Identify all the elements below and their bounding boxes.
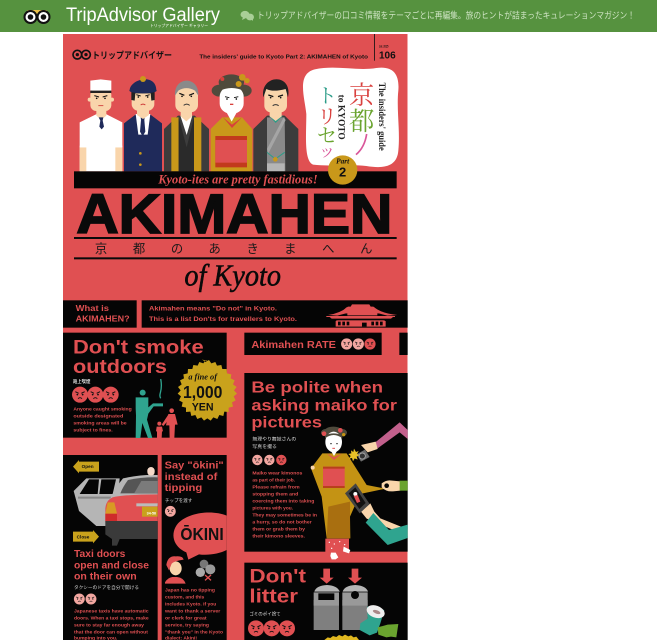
japanese subtitle: [95, 242, 373, 256]
issue number: Jul. 2015: [379, 45, 388, 49]
arrow: open: [73, 460, 99, 473]
panel: say okini: tipping: [165, 483, 202, 494]
arrow: open: Open: [82, 464, 94, 469]
panel: be polite: as part of their job.: [252, 477, 295, 482]
title card: white blob: セ: [317, 126, 337, 148]
panel: be polite: asking maiko for: [251, 397, 397, 414]
body text: want to thank a server: [164, 608, 221, 613]
rule: [74, 237, 397, 239]
rate box: [244, 333, 382, 355]
japanese subtitle: へ: [322, 242, 335, 256]
japanese label: チップを渡す: [165, 497, 193, 504]
rating faces: [72, 387, 119, 403]
illustration: taxi: 34-56: [147, 512, 156, 516]
banner: Kyoto-ites are pretty fastidious: [74, 171, 397, 188]
rating faces: [74, 594, 96, 604]
heading: Don't: [249, 566, 307, 587]
illustration: trash bins: [314, 585, 368, 630]
panel: be polite: They may sometimes be in: [252, 512, 317, 517]
badge: fine of 1,000 yen: YEN: [192, 401, 214, 413]
japanese subtitle: あ: [208, 242, 221, 256]
header bar: [0, 0, 657, 32]
of Kyoto: of Kyoto: [184, 258, 281, 292]
arrow: close: [73, 530, 99, 543]
banner: Kyoto-ites are pretty fastidious: Kyoto-ites are pretty fastidious!: [157, 173, 318, 187]
issue number: [374, 34, 396, 61]
badge: part 2: 2: [339, 165, 346, 180]
panel: what is akimahen: AKIMAHEN?: [76, 315, 130, 324]
panel: taxi doors: [63, 455, 158, 640]
rule: [74, 257, 397, 259]
panel: don't smoke outdoors: [63, 333, 227, 438]
title card: white blob: [303, 68, 399, 167]
panel: be polite: [244, 373, 408, 552]
arrows down: [320, 569, 362, 584]
panel: be polite: them or grab them by: [252, 527, 306, 532]
title card: white blob: リ: [317, 106, 337, 128]
speech bubble okini: [173, 513, 227, 560]
japanese subtitle: の: [171, 242, 183, 256]
japanese subtitle: ま: [284, 242, 297, 256]
japanese subtitle: ん: [360, 242, 373, 256]
black tab right of rate box: [399, 333, 408, 355]
body text: doors. When a taxi stops, make: [74, 615, 149, 620]
panel: taxi doors: open and close: [74, 560, 149, 571]
panel: don't smoke outdoors: outdoors: [73, 357, 167, 378]
title card: white blob: The insiders' guide: [376, 83, 387, 151]
illustration: chef: [80, 79, 122, 171]
illustration: maiko: [211, 74, 252, 171]
japanese label: ゴミのポイ捨て: [249, 611, 281, 618]
header subtitle small: トリップアドバイザー ギャラリー: [150, 22, 208, 28]
panel: what is akimahen: What is: [76, 304, 110, 313]
illustration: maiko with photographers: [311, 422, 408, 559]
body text: Japanese taxis have automatic: [74, 608, 149, 613]
panel: say okini: [162, 455, 227, 640]
body text: Japan has no tipping: [165, 587, 215, 592]
illustration: man in kimono: [253, 79, 298, 171]
panel: be polite: a hurry, so do not bother: [252, 520, 312, 525]
body text: "thank you" in the Kyoto: [165, 629, 223, 634]
icon: temple: [326, 304, 397, 327]
body text: or clerk for great: [165, 615, 207, 620]
panel: akimahen rate and maiko: [244, 333, 408, 559]
body text: subject to fines.: [73, 427, 113, 432]
body text: [164, 587, 223, 640]
panel: what is akimahen: [63, 300, 137, 328]
icon: smoker with family: [136, 379, 178, 438]
rating face: [165, 506, 176, 517]
panel: don't litter: litter: [249, 587, 299, 608]
poster background: [63, 34, 408, 640]
panel: be polite: coercing them into taking: [252, 498, 315, 503]
heading: Taxi doors: [74, 549, 126, 560]
vertical title text: 京: [349, 82, 374, 110]
title card: white blob: to KYOTO: [337, 95, 347, 140]
illustration: conductor: [124, 76, 162, 171]
badge: fine partial: [324, 635, 359, 640]
body text: smoking areas will be: [73, 420, 127, 425]
panel: say okini: instead of: [165, 472, 218, 483]
badge: part 2: [328, 155, 357, 185]
panel: be polite: pictures: [251, 415, 322, 432]
body text: service, try saying: [165, 622, 209, 627]
badge: fine of 1,000 yen: [178, 359, 237, 421]
body text: [73, 407, 132, 432]
illustration: monk: [164, 81, 209, 171]
issue number: 106: [379, 50, 396, 61]
rate box: Akimahen RATE: [251, 340, 336, 351]
panel: taxi doors: on their own: [74, 572, 137, 583]
panel: be polite: Please refrain from: [252, 484, 300, 489]
panel: be polite: stopping them and: [252, 491, 299, 496]
panel: definition: Akimahen means "Do not" in Kyoto.: [149, 306, 277, 312]
body text: [74, 608, 149, 640]
panel: be polite: 写真を撮る: [252, 443, 277, 450]
body text: custom, and this: [165, 594, 205, 599]
poster title section: [63, 183, 408, 328]
header title: TripAdvisor Gallery: [66, 5, 220, 26]
body text: outside designated: [73, 413, 124, 418]
panel: be polite: 無理やり舞妓さんの: [252, 436, 296, 443]
panel: definition: This is a list Don'ts for travellers to Kyoto.: [149, 317, 297, 323]
panel: be polite: their kimono sleeves.: [252, 534, 305, 539]
title card: white blob: ッ: [319, 142, 335, 161]
badge: fine of 1,000 yen: 1,000: [183, 382, 222, 402]
arrow: close: Close: [77, 534, 90, 539]
japanese label: 路上喫煙: [73, 378, 91, 385]
heading: Don't smoke: [73, 338, 204, 359]
heading: Say "ōkini": [165, 461, 224, 472]
panel: definition: [142, 300, 408, 328]
body text: sure to stay far enough away: [74, 622, 145, 627]
speech bubble okini: ŌKINI: [180, 524, 224, 544]
badge: part 2: Part: [336, 157, 350, 166]
hand with smartphone: [345, 483, 408, 545]
arm with camera: [348, 422, 408, 462]
logo: tripadvisor jp: トリップアドバイザー: [92, 50, 172, 60]
poster top section: [73, 34, 399, 188]
panel: be polite: Maiko wear kimonos: [252, 470, 303, 475]
icon: TripAdvisor owl logo: [24, 10, 50, 24]
panel: don't litter: [244, 563, 408, 640]
body text: that the door can open without: [74, 629, 149, 634]
title: AKIMAHEN: AKIMAHEN: [76, 183, 392, 245]
body text: includes Kyoto. If you: [165, 601, 217, 606]
illustration: litter can and wrapper: [360, 603, 398, 637]
japanese subtitle: 都: [133, 242, 145, 256]
panel: be polite: Be polite when: [251, 380, 383, 397]
hand pinching sleeve: [382, 480, 408, 491]
rating faces: [248, 620, 295, 636]
japanese subtitle: 京: [95, 242, 107, 256]
panel: be polite: pictures with you.: [252, 505, 293, 510]
body text: Anyone caught smoking: [73, 407, 132, 412]
title card: white blob: ト: [317, 85, 337, 107]
badge: fine of 1,000 yen: a fine of: [188, 373, 218, 382]
illustration: taxi: [74, 467, 158, 546]
icon: speech bubbles: [240, 11, 254, 21]
title card: white blob: 都: [349, 108, 374, 136]
guide line: The insiders' guide to Kyoto Part 2: AKIMAHEN of Kyoto: [199, 54, 369, 60]
japanese subtitle: き: [246, 242, 259, 256]
japanese label: タクシーのドアを自分で開ける: [74, 584, 139, 591]
illustration: server and coins: [165, 556, 215, 584]
